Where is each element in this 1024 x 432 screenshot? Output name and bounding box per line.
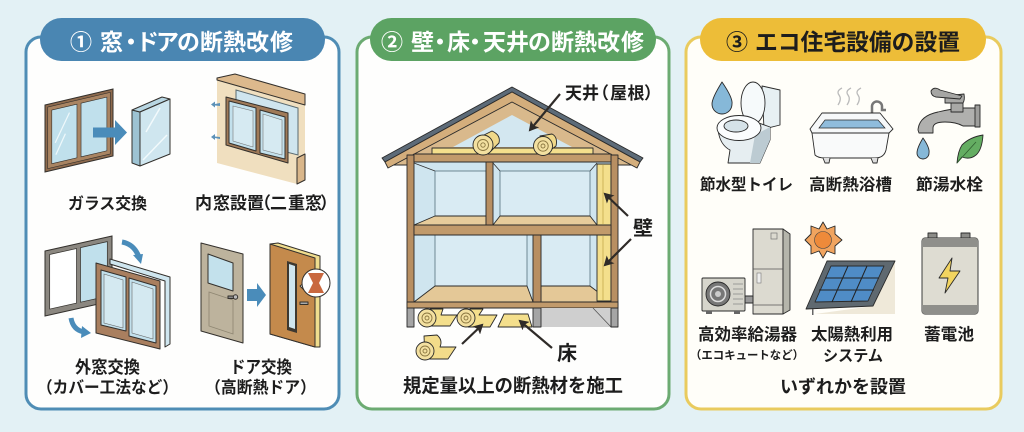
ceiling insulation and rolls — [432, 148, 593, 154]
panel: eco housing equipment — [686, 18, 1001, 409]
icon: inner window — [211, 74, 305, 184]
label: eco cute note: （エコキュートなど） — [690, 348, 804, 362]
label: door type: （高断熱ドア） — [205, 377, 316, 397]
loose insulation roll — [424, 335, 456, 359]
header: window and door — [40, 18, 325, 61]
panel frame 1 — [26, 37, 339, 409]
label: ceiling: 天井（屋根） — [565, 84, 661, 103]
label: outer window: 外窓交換 — [75, 358, 140, 377]
illustration: house cross-section — [382, 87, 643, 360]
label: water heater: 高効率給湯器 — [698, 324, 798, 344]
label: inner window: 内窓設置（二重窓） — [195, 194, 337, 213]
arrow: ceiling — [530, 94, 560, 130]
label: glass replacement: ガラス交換 — [68, 195, 147, 213]
arrow: wall lower — [605, 239, 631, 265]
icon: door replacement — [201, 243, 330, 347]
icon: insulated bathtub — [810, 88, 893, 163]
panel: window and door insulation — [26, 18, 339, 409]
label: solar thermal: 太陽熱利用 — [811, 325, 893, 344]
header: eco equipment — [700, 18, 986, 61]
label: door: ドア交換 — [230, 358, 292, 377]
header: window and door: ① — [70, 30, 92, 55]
icon: solar thermal — [805, 222, 895, 315]
header: wall floor ceiling: ② — [381, 30, 403, 55]
label: floor: 床 — [557, 342, 577, 365]
header: wall floor ceiling: 壁・床・天井の断熱改修 — [411, 29, 644, 55]
panel frame 3 — [686, 37, 1001, 409]
rooms — [414, 162, 611, 302]
gable — [387, 100, 637, 165]
icon: storage battery — [922, 233, 978, 314]
icon: glass replacement — [45, 89, 170, 172]
panel frame 2 — [357, 37, 669, 409]
arrow: floor right — [520, 321, 552, 348]
icon: outer window replacement — [45, 236, 170, 349]
icon: water-saving toilet — [712, 82, 780, 163]
icon: high-efficiency water heater — [702, 229, 790, 314]
timber frame — [407, 155, 414, 308]
header: eco equipment: エコ住宅設備の設置 — [755, 29, 960, 55]
icon: hot water saving faucet — [917, 88, 983, 163]
arrow: floor left — [462, 325, 482, 344]
panel: wall floor ceiling insulation — [357, 18, 669, 409]
roof — [382, 87, 643, 162]
label: toilet: 節水型トイレ — [700, 175, 793, 194]
label: faucet: 節湯水栓 — [916, 175, 983, 194]
caption: insulation requirement: 規定量以上の断熱材を施工 — [403, 375, 623, 397]
wall insulation — [597, 164, 611, 301]
header: window and door: 窓・ドアの断熱改修 — [100, 29, 293, 55]
arrow: wall upper — [605, 194, 628, 216]
header: wall floor ceiling — [370, 18, 656, 61]
foundation — [541, 308, 611, 327]
label: system: システム — [823, 348, 883, 365]
label: battery: 蓄電池 — [924, 325, 975, 344]
label: wall: 壁 — [633, 217, 653, 240]
floor insulation — [427, 309, 457, 326]
header: eco equipment: ③ — [726, 30, 748, 55]
caption: install any: いずれかを設置 — [780, 377, 906, 397]
label: outer window method: （カバー工法など） — [37, 378, 178, 397]
label: bathtub: 高断熱浴槽 — [809, 175, 892, 194]
